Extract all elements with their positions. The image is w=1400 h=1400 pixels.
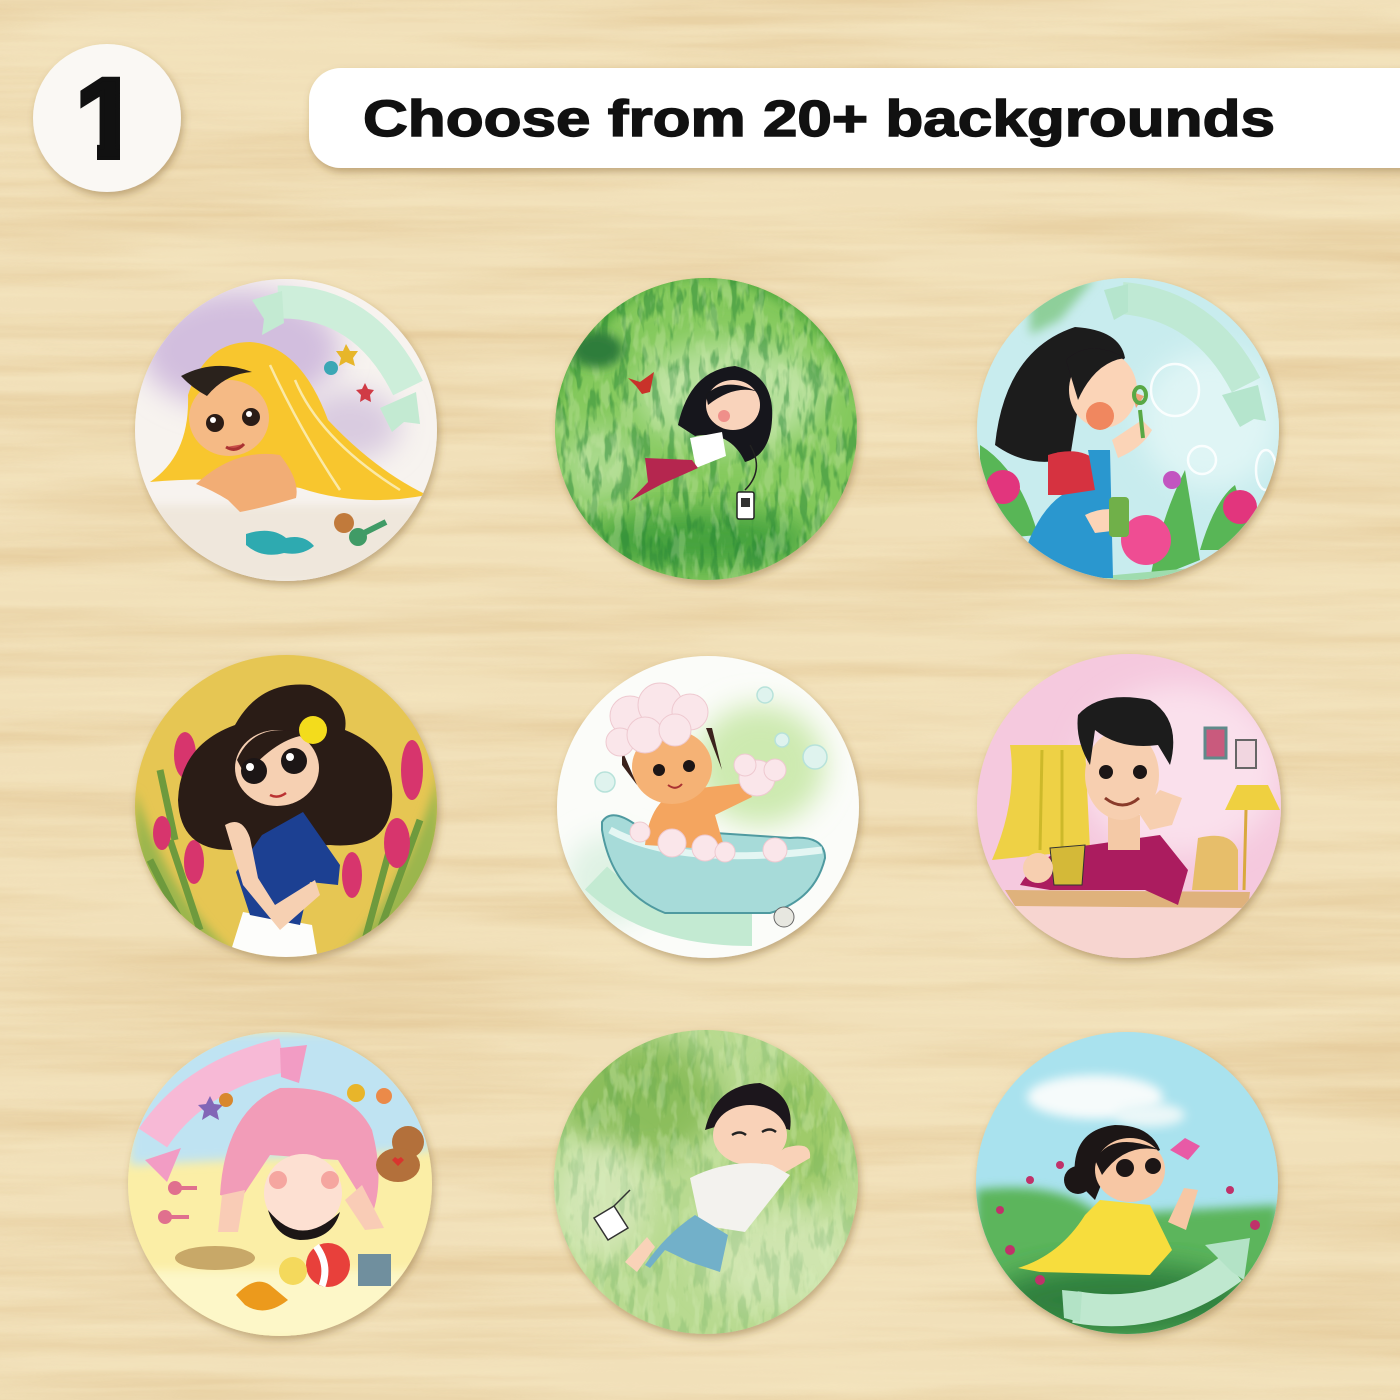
hanging toys (324, 344, 374, 402)
boy (705, 1083, 791, 1130)
sticker: girl resting on grass with music player (555, 260, 857, 580)
girl (1018, 1200, 1172, 1275)
toddler (220, 1088, 378, 1215)
ribbon banner (278, 302, 408, 388)
step number badge: 1 (75, 54, 139, 184)
sticker: baby under yellow towel (135, 279, 437, 585)
pink spoons (158, 1181, 197, 1224)
butterfly (1170, 1138, 1200, 1160)
white skirt (232, 912, 317, 957)
pink flowers (153, 732, 423, 898)
sticker: girl with butterfly (976, 1032, 1278, 1340)
bubbles (595, 687, 827, 792)
bath tub (602, 815, 825, 913)
arms (225, 822, 320, 930)
title banner (309, 68, 1400, 168)
teddy bear (376, 1126, 424, 1182)
table (1005, 890, 1250, 908)
ribbon banner (1075, 1268, 1232, 1310)
pink ribbon banner (153, 1055, 283, 1138)
sticker: girl blowing bubbles (977, 278, 1280, 585)
yellow towel (150, 342, 427, 500)
foam (606, 683, 787, 862)
floor toys (246, 531, 314, 555)
lamp (1225, 785, 1280, 810)
music player (745, 445, 756, 490)
sticker: baby in bubble bath (557, 656, 859, 958)
toys (175, 1246, 255, 1270)
sticker: man with coffee at table (977, 654, 1281, 965)
ribbon banner (1122, 298, 1246, 385)
wall frames (1205, 728, 1226, 758)
coffee cup (1050, 845, 1085, 885)
sticker: girl with curly hair in flower field (135, 655, 440, 960)
blue shirt (236, 812, 340, 925)
baby (645, 783, 752, 850)
butterfly (628, 372, 654, 394)
flowers and leaves (980, 445, 1255, 580)
sticker: toddler upside down with toys (128, 1032, 432, 1340)
man (1020, 835, 1188, 905)
face (235, 730, 319, 806)
girl (995, 327, 1125, 462)
hair (178, 684, 392, 850)
ribbon banner (596, 878, 752, 930)
sticker: boy lying on grass (550, 1030, 860, 1334)
bee and butterfly (347, 1084, 365, 1102)
curtain window (992, 745, 1090, 860)
baby (196, 454, 297, 512)
step number badge (33, 44, 181, 192)
girl (678, 366, 772, 462)
music player (614, 1190, 630, 1206)
bubbles (1151, 364, 1276, 490)
title banner: Choose from 20+ backgrounds (363, 90, 1275, 147)
